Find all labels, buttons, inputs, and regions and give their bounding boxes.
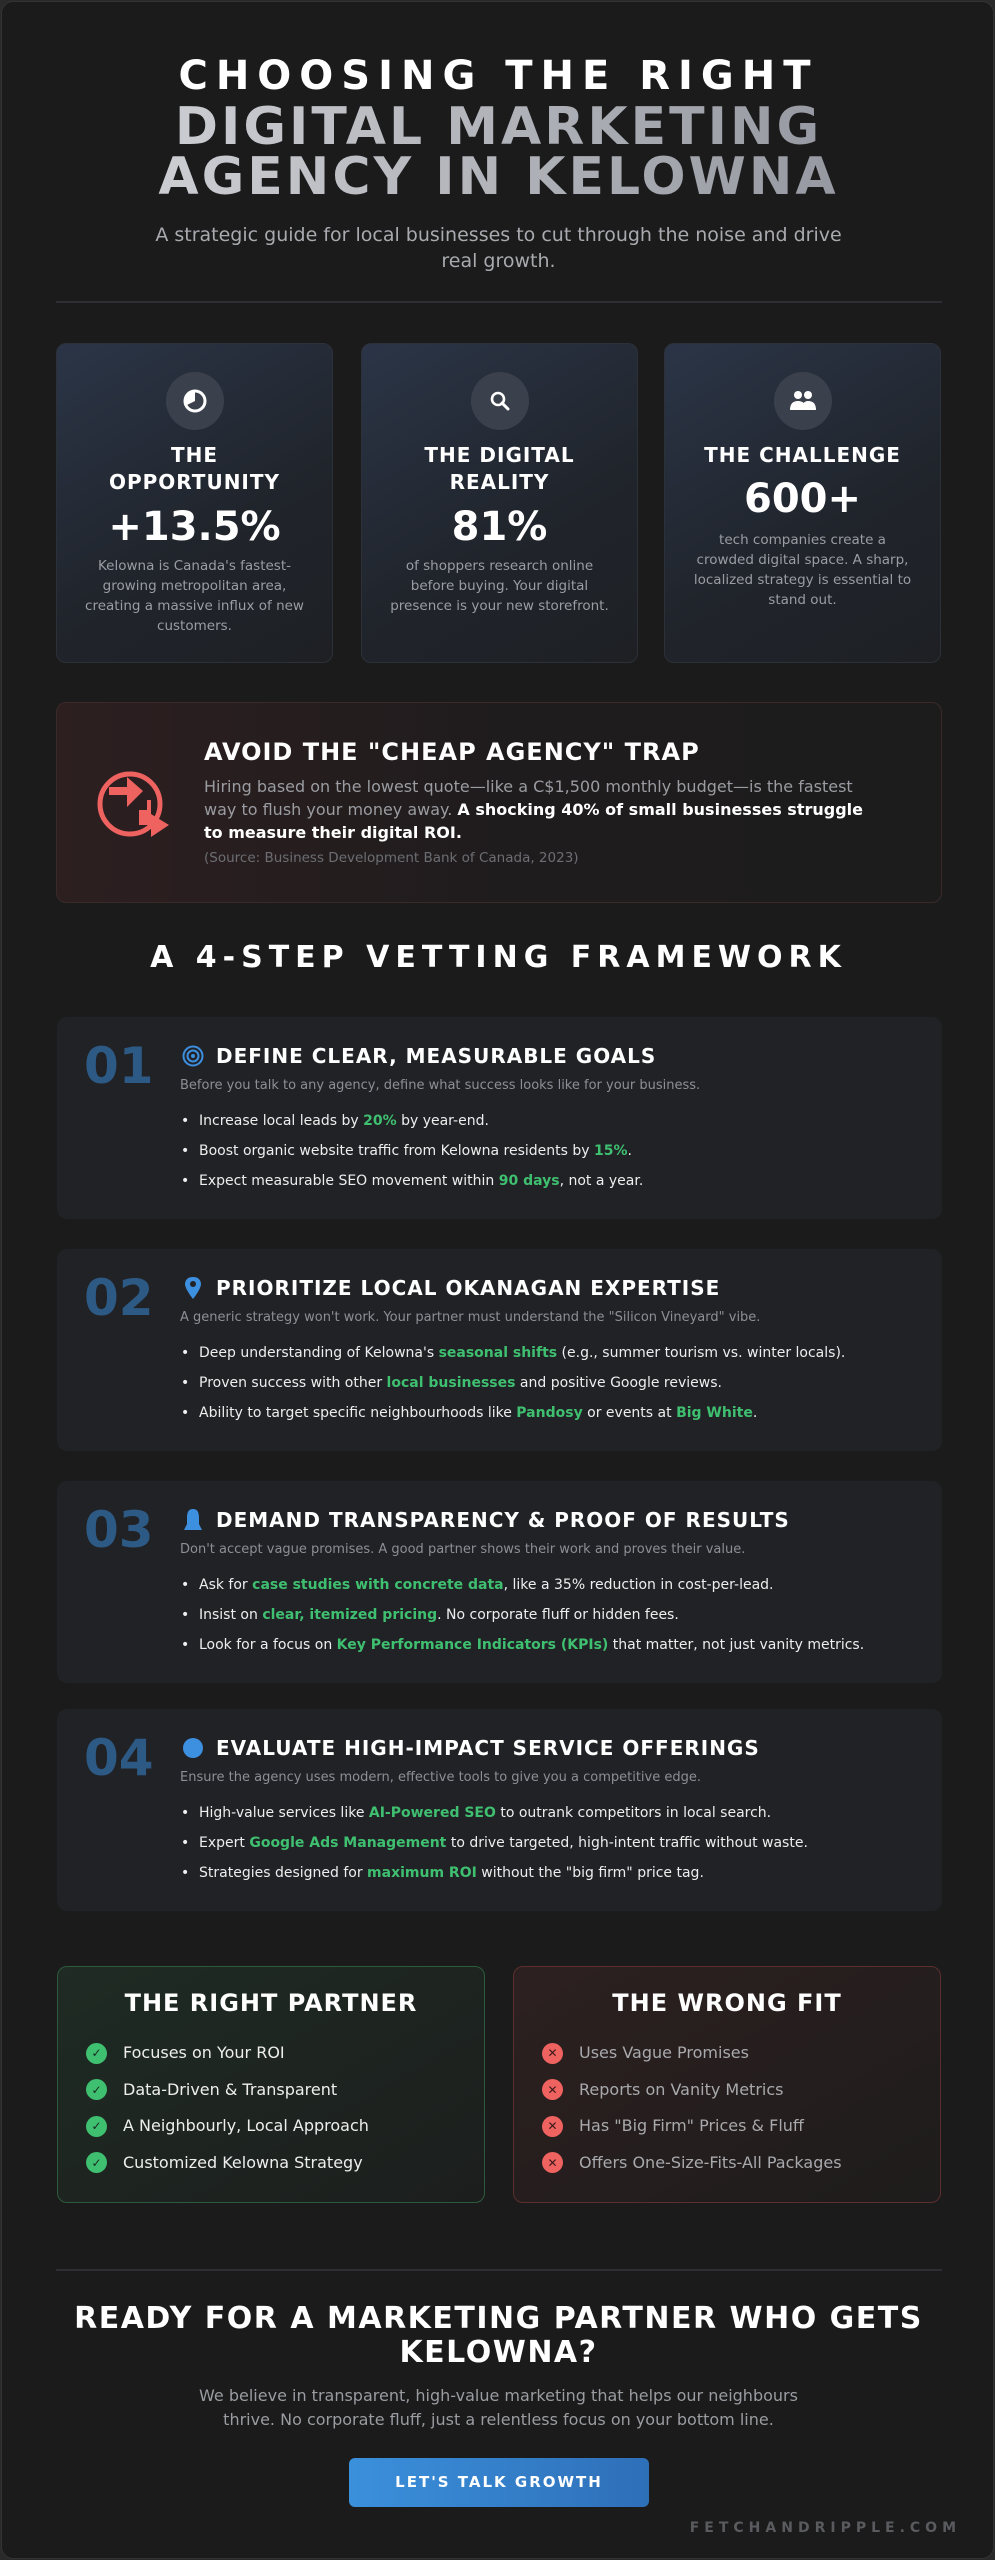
stat card: challenge: THE CHALLENGE bbox=[704, 443, 901, 467]
step 3: DEMAND TRANSPARENCY & PROOF OF RESULTS bbox=[216, 1508, 790, 1532]
panel: wrong fit: ✕ bbox=[547, 2082, 558, 2096]
step 1: 01 bbox=[84, 1037, 154, 1095]
stat card: challenge: 600+ bbox=[744, 476, 861, 522]
icon: chart bbox=[166, 372, 224, 430]
step 3: Don't accept vague promises. A good partner shows their work and proves their value. bbox=[180, 1542, 745, 1557]
step 2: Proven success with other local businesses and positive Google reviews. bbox=[199, 1375, 722, 1391]
step 1: DEFINE CLEAR, MEASURABLE GOALS bbox=[216, 1044, 656, 1068]
step 3: Look for a focus on Key Performance Indicators (KPIs) that matter, not just vanity metrics. bbox=[199, 1637, 864, 1653]
step 3: 03 bbox=[84, 1501, 154, 1559]
title: AGENCY IN KELOWNA bbox=[158, 147, 839, 207]
icon: people bbox=[774, 372, 832, 430]
CTA button bbox=[349, 2458, 649, 2507]
callout body: Hiring based on the lowest quote—like a C$1,500 monthly budget—is the fastest bbox=[204, 777, 853, 796]
stat card: digital reality: of shoppers research online before buying. Your digital presence is your new storefront. bbox=[390, 558, 609, 614]
section heading: A 4-STEP VETTING FRAMEWORK bbox=[150, 940, 847, 975]
stat card: opportunity: OPPORTUNITY bbox=[109, 470, 280, 494]
step 2: Ability to target specific neighbourhoods like Pandosy or events at Big White. bbox=[199, 1405, 757, 1421]
step 2: Deep understanding of Kelowna's seasonal shifts (e.g., summer tourism vs. winter locals). bbox=[199, 1345, 845, 1361]
step 1: Increase local leads by 20% by year-end. bbox=[199, 1113, 489, 1129]
stat card: challenge bbox=[664, 343, 941, 663]
panel: right partner: A Neighbourly, Local Approach bbox=[123, 2116, 369, 2135]
panel: wrong fit: THE WRONG FIT bbox=[612, 1989, 842, 2017]
stat card: opportunity: THE bbox=[171, 443, 218, 467]
step 2: A generic strategy won't work. Your partner must understand the "Silicon Vineyard" vibe. bbox=[180, 1310, 760, 1325]
panel: right partner: Data-Driven & Transparent bbox=[123, 2080, 337, 2098]
step 3: Ask for case studies with concrete data, like a 35% reduction in cost-per-lead. bbox=[199, 1577, 774, 1593]
CTA button: LET'S TALK GROWTH bbox=[395, 2473, 603, 2491]
panel: wrong fit: Uses Vague Promises bbox=[579, 2043, 749, 2062]
panel: right partner: Customized Kelowna Strategy bbox=[123, 2152, 363, 2172]
stat card: digital reality: 81% bbox=[452, 504, 547, 550]
stat card: digital reality bbox=[361, 343, 638, 663]
panel: right partner bbox=[57, 1966, 485, 2203]
panel: wrong fit: ✕ bbox=[547, 2119, 558, 2133]
step 4: 04 bbox=[84, 1729, 154, 1787]
title: CHOOSING THE RIGHT bbox=[178, 53, 819, 99]
panel: wrong fit: ✕ bbox=[547, 2046, 558, 2060]
panel: wrong fit: Has "Big Firm" Prices & Fluff bbox=[579, 2116, 804, 2135]
stat card: challenge: tech companies create a crowded digital space. A sharp, localized strategy is essential to stand out. bbox=[694, 532, 911, 608]
footer brand: FETCHANDRIPPLE.COM bbox=[690, 2520, 961, 2536]
panel: right partner: ✓ bbox=[91, 2046, 102, 2060]
step 4: Ensure the agency uses modern, effective tools to give you a competitive edge. bbox=[180, 1770, 701, 1785]
icon: warning arrows bbox=[98, 772, 169, 837]
icon: search bbox=[470, 372, 528, 430]
stat card: opportunity bbox=[56, 343, 333, 663]
callout heading: AVOID THE "CHEAP AGENCY" TRAP bbox=[204, 738, 700, 766]
step 1 bbox=[57, 1017, 942, 1219]
stat card: opportunity: Kelowna is Canada's fastest-growing metropolitan area, creating a massive influx of new customers. bbox=[85, 558, 304, 634]
subtitle bbox=[155, 224, 842, 272]
step 4: EVALUATE HIGH-IMPACT SERVICE OFFERINGS bbox=[216, 1736, 760, 1760]
panel: right partner: THE RIGHT PARTNER bbox=[125, 1989, 417, 2017]
panel: wrong fit bbox=[513, 1966, 941, 2203]
step 2 bbox=[57, 1249, 942, 1451]
panel: right partner: ✓ bbox=[91, 2119, 102, 2133]
step 2: PRIORITIZE LOCAL OKANAGAN EXPERTISE bbox=[216, 1276, 720, 1300]
callout: cheap agency trap bbox=[56, 702, 942, 903]
stat card: opportunity: +13.5% bbox=[108, 504, 281, 550]
callout body bbox=[204, 777, 863, 842]
CTA heading: READY FOR A MARKETING PARTNER WHO GETS KELOWNA? bbox=[74, 2301, 923, 2370]
step 3 bbox=[57, 1481, 942, 1683]
step 4: High-value services like AI-Powered SEO to outrank competitors in local search. bbox=[199, 1805, 771, 1821]
CTA text: We believe in transparent, high-value marketing that helps our neighbours thrive. No corporate fluff, just a relentless focus on your bottom line. bbox=[199, 2386, 798, 2429]
title: DIGITAL MARKETING bbox=[175, 97, 822, 157]
callout body: way to flush your money away. A shocking 40% of small businesses struggle bbox=[204, 800, 863, 819]
step 3: Insist on clear, itemized pricing. No corporate fluff or hidden fees. bbox=[199, 1607, 679, 1623]
step 1: Expect measurable SEO movement within 90 days, not a year. bbox=[199, 1173, 643, 1189]
title bbox=[158, 53, 839, 207]
panel: right partner: ✓ bbox=[91, 2082, 102, 2096]
panel: wrong fit: Reports on Vanity Metrics bbox=[579, 2080, 783, 2098]
panel: right partner: Focuses on Your ROI bbox=[123, 2043, 285, 2062]
stat card: digital reality: THE DIGITAL bbox=[424, 443, 575, 467]
source: (Source: Business Development Bank of Canada, 2023) bbox=[204, 850, 579, 866]
callout body: to measure their digital ROI. bbox=[204, 823, 462, 842]
step 1: Boost organic website traffic from Kelowna residents by 15%. bbox=[199, 1143, 632, 1159]
panel: right partner: ✓ bbox=[91, 2156, 102, 2170]
step 1: Before you talk to any agency, define what success looks like for your business. bbox=[180, 1078, 700, 1093]
subtitle: real growth. bbox=[441, 250, 556, 272]
panel: wrong fit: ✕ bbox=[547, 2156, 558, 2170]
subtitle: A strategic guide for local businesses to cut through the noise and drive bbox=[155, 224, 842, 246]
panel: wrong fit: Offers One-Size-Fits-All Packages bbox=[579, 2152, 842, 2172]
step 4: Strategies designed for maximum ROI without the "big firm" price tag. bbox=[199, 1865, 704, 1881]
step 4: Expert Google Ads Management to drive targeted, high-intent traffic without waste. bbox=[199, 1835, 808, 1851]
step 4 bbox=[57, 1709, 942, 1911]
step 2: 02 bbox=[84, 1269, 154, 1327]
stat card: digital reality: REALITY bbox=[450, 470, 549, 494]
